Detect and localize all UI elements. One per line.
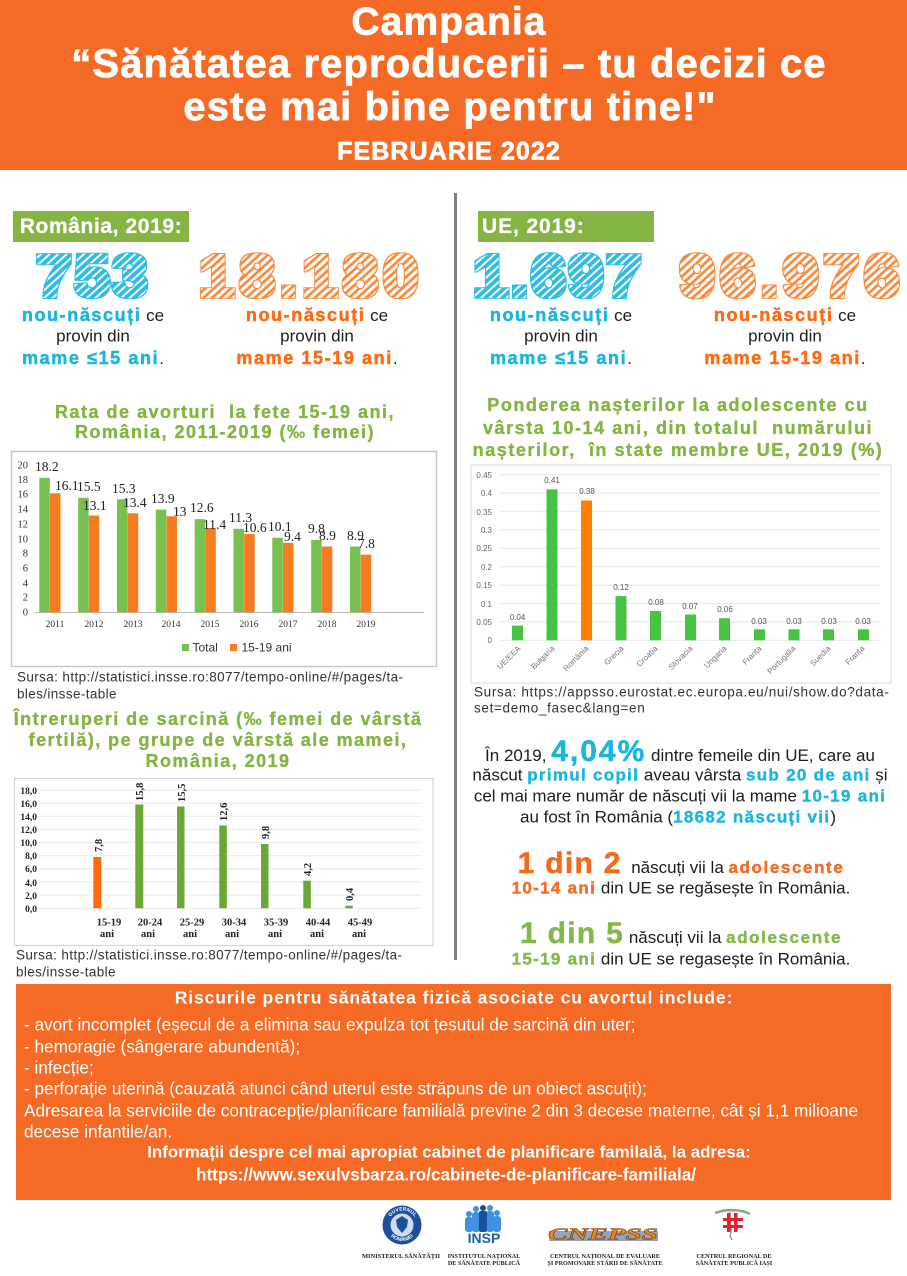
bar chart: abortion rate 2011-2019: Total bbox=[192, 640, 218, 654]
bar chart: EU share of births to adolescents: România bbox=[561, 644, 591, 673]
label: UE 2019 bbox=[478, 211, 654, 242]
bar chart: abortion rate 2011-2019: 8.9 bbox=[319, 528, 336, 543]
text: mame ≤15 ani. bbox=[22, 348, 164, 368]
bar chart: EU share of births to adolescents: 0.25 bbox=[476, 544, 493, 553]
bar chart: abortion rate 2011-2019: 13 bbox=[173, 504, 187, 519]
title line 2: “Sănătatea reproducerii – tu decizi ce bbox=[71, 42, 827, 86]
logo: Ministerul Sanatatii: MINISTERUL SĂNĂTĂȚII bbox=[362, 1252, 440, 1260]
bar chart: EU share of births to adolescents: 0 bbox=[488, 636, 493, 645]
contact information: Informații despre cel mai apropiat cabinet de planificare familală, la adresa: bbox=[147, 1143, 751, 1162]
bar chart: EU share of births to adolescents: Franța bbox=[844, 644, 867, 667]
bar chart: abortion rate 2011-2019: 9.4 bbox=[284, 529, 301, 544]
bar chart: EU share of births to adolescents: 0.4 bbox=[481, 489, 493, 498]
hatched big numbers bbox=[36, 244, 904, 308]
bar chart: pregnancy terminations by age group: 15,5 bbox=[177, 784, 188, 802]
panel heading: Riscurile pentru sănătatea fizică asociate cu avortul include: bbox=[175, 987, 733, 1007]
label: Romania 2019 bbox=[13, 211, 189, 242]
bar chart: pregnancy terminations by age group: 0,0 bbox=[25, 905, 37, 915]
bar chart: abortion rate 2011-2019: 7.8 bbox=[358, 536, 375, 551]
date: FEBRUARIE 2022 bbox=[337, 138, 561, 166]
bar chart: abortion rate 2011-2019: 2 bbox=[23, 592, 28, 604]
bar chart: pregnancy terminations by age group: 40-44 bbox=[306, 918, 331, 928]
bar chart: EU share of births to adolescents: Franța bbox=[741, 644, 764, 667]
contact information bbox=[147, 1143, 751, 1184]
logo: INSP: INSP bbox=[468, 1230, 500, 1246]
bar chart: abortion rate 2011-2019: 10.1 bbox=[268, 519, 292, 534]
text: România, 2019 bbox=[146, 751, 290, 771]
bar chart: pregnancy terminations by age group: ani bbox=[225, 929, 239, 940]
logo: Centrul Regional Iasi: CENTRUL REGIONAL DE bbox=[697, 1253, 771, 1260]
bar chart: pregnancy terminations by age group: 12,0 bbox=[20, 826, 37, 836]
bar chart: EU share of births to adolescents: 0.3 bbox=[481, 526, 493, 535]
text: născut primul copil aveau vârsta sub 20 de ani și bbox=[472, 766, 888, 784]
callout: 1 in 2 bbox=[512, 847, 850, 898]
logo: CNEPSS: ȘI PROMOVARE STĂRII DE SĂNĂTATE bbox=[547, 1259, 663, 1267]
text: nou-născuți ce bbox=[246, 305, 388, 325]
bar chart: pregnancy terminations by age group: 15,8 bbox=[135, 783, 146, 801]
label: UE 2019: UE, 2019: bbox=[482, 215, 585, 238]
title line 1: Campania bbox=[351, 0, 547, 44]
text: provin din bbox=[748, 326, 822, 346]
bar chart: EU share of births to adolescents: 0.03 bbox=[821, 617, 837, 626]
bar chart: abortion rate 2011-2019: 0 bbox=[23, 608, 28, 618]
bar chart: EU share of births to adolescents: 0.08 bbox=[648, 598, 664, 607]
stat text: UE under 15 bbox=[490, 305, 632, 368]
heading: pregnancy terminations chart bbox=[12, 708, 422, 771]
logo: Centrul Regional Iasi: SĂNĂTATE PUBLICĂ IAȘI bbox=[696, 1259, 773, 1267]
bar chart: abortion rate 2011-2019: 10 bbox=[18, 534, 28, 546]
number 96.976: 96.976 bbox=[680, 244, 904, 308]
panel: physical health risks bbox=[16, 984, 891, 1200]
bar chart: EU share of births to adolescents: Suedia bbox=[808, 644, 833, 668]
text: mame 15-19 ani. bbox=[704, 348, 866, 368]
bar chart: abortion rate 2011-2019: 20 bbox=[18, 460, 28, 472]
bar chart: abortion rate 2011-2019: 16 bbox=[18, 490, 28, 500]
bar chart: EU share of births to adolescents: UE/EEA bbox=[495, 644, 523, 671]
bar chart: EU share of births to adolescents: Portugalia bbox=[766, 644, 798, 676]
bar chart: pregnancy terminations by age group: ani bbox=[141, 929, 155, 940]
text: 15-19 ani din UE se regasește în România. bbox=[512, 950, 850, 968]
bar chart: EU share of births to adolescents: 0.03 bbox=[751, 617, 767, 626]
header banner bbox=[0, 0, 907, 170]
bar chart: EU share of births to adolescents: 0.05 bbox=[476, 618, 493, 627]
bar chart: pregnancy terminations by age group: 8,0 bbox=[25, 852, 37, 862]
text: set=demo_fasec&lang=en bbox=[474, 700, 645, 715]
bar chart: abortion rate 2011-2019: 2012 bbox=[84, 620, 104, 630]
bar chart: abortion rate 2011-2019: 2019 bbox=[356, 620, 376, 630]
bar chart: pregnancy terminations by age group: ani bbox=[310, 929, 324, 940]
bar chart: abortion rate 2011-2019: 2015 bbox=[200, 620, 220, 630]
bar chart: abortion rate 2011-2019: 9.8 bbox=[308, 521, 325, 536]
bar chart: abortion rate 2011-2019: 8.9 bbox=[347, 528, 364, 543]
bar chart: pregnancy terminations by age group: 0,4 bbox=[345, 887, 356, 901]
bar chart: EU share of births to adolescents: 0.03 bbox=[855, 617, 871, 626]
logo: INSP bbox=[448, 1205, 521, 1267]
logo: CNEPSS: CENTRUL NAȚIONAL DE EVALUARE bbox=[550, 1253, 660, 1260]
text: au fost în România (18682 născuți vii) bbox=[520, 808, 836, 826]
bar chart: abortion rate 2011-2019: 10.6 bbox=[243, 520, 267, 535]
bar chart: pregnancy terminations by age group: ani bbox=[268, 929, 282, 940]
bar chart: EU share of births to adolescents: 0.41 bbox=[544, 476, 560, 485]
bar chart: pregnancy terminations by age group: 9,8 bbox=[261, 826, 272, 839]
text: Întreruperi de sarcină (‰ femei de vârstă bbox=[14, 709, 422, 729]
text: provin din bbox=[524, 326, 598, 346]
bar chart: abortion rate 2011-2019: 18 bbox=[18, 475, 28, 486]
bar chart: abortion rate 2011-2019: 2011 bbox=[46, 620, 65, 630]
text: Sursa: https://appsso.eurostat.ec.europa.eu/nui/show.do?data- bbox=[474, 684, 890, 699]
bar chart: EU share of births to adolescents: 0.15 bbox=[476, 581, 493, 590]
bar chart: EU share of births to adolescents: 0.2 bbox=[481, 563, 493, 572]
bar chart: abortion rate 2011-2019: 13.4 bbox=[123, 495, 147, 510]
bar chart: abortion rate 2011-2019: 2014 bbox=[162, 620, 181, 630]
stat text: Romania under 15 bbox=[22, 305, 164, 368]
text: nou-născuți ce bbox=[490, 305, 632, 325]
text: 10-14 ani din UE se regăsește în România. bbox=[512, 878, 850, 898]
bar chart: pregnancy terminations by age group: 14,0 bbox=[20, 813, 37, 823]
text: nou-născuți ce bbox=[714, 305, 856, 325]
bar chart: EU share of births to adolescents: Bulgaria bbox=[529, 644, 557, 671]
bar chart: pregnancy terminations by age group: ani bbox=[352, 929, 366, 940]
bar chart: EU share of births to adolescents: 0.35 bbox=[476, 508, 493, 517]
bar chart: pregnancy terminations by age group: 35-39 bbox=[264, 918, 288, 928]
column divider bbox=[454, 193, 457, 960]
bar chart: pregnancy terminations by age group: 25-29 bbox=[180, 918, 204, 928]
bar chart: abortion rate 2011-2019: 15.5 bbox=[77, 479, 101, 494]
logo: INSP: DE SĂNĂTATE PUBLICĂ bbox=[448, 1259, 521, 1267]
text: 1 din 5 născuți vii la adolescente bbox=[520, 917, 842, 950]
bar chart: EU share of births to adolescents: 0.1 bbox=[481, 600, 493, 609]
label: Romania 2019: România, 2019: bbox=[20, 215, 182, 238]
heading: abortion rate chart bbox=[55, 402, 395, 442]
bar chart: EU share of births to adolescents: 0.06 bbox=[717, 605, 733, 614]
logo: Ministerul Sanatatii bbox=[362, 1206, 440, 1260]
logo: CNEPSS bbox=[547, 1224, 663, 1267]
text: fertilă), pe grupe de vârstă ale mamei, bbox=[29, 730, 407, 750]
text: România, 2011-2019 (‰ femei) bbox=[75, 422, 375, 442]
bar chart: abortion rate 2011-2019: 15.3 bbox=[112, 481, 136, 496]
source note 1 bbox=[17, 669, 403, 701]
bar chart: pregnancy terminations by age group: 4,0 bbox=[25, 879, 37, 889]
bar chart: pregnancy terminations by age group: 45-49 bbox=[348, 918, 372, 928]
bar chart: pregnancy terminations by age group: ani bbox=[100, 929, 114, 940]
bar chart: pregnancy terminations by age group: 16,0 bbox=[20, 800, 37, 810]
bar chart: pregnancy terminations by age group: 7,8 bbox=[94, 839, 105, 852]
bar chart: EU share of births to adolescents: 0.07 bbox=[682, 602, 698, 611]
bar chart: EU share of births to adolescents: Croația bbox=[635, 644, 660, 669]
risk list bbox=[24, 1014, 858, 1141]
bar chart: abortion rate 2011-2019: 12.6 bbox=[190, 500, 214, 515]
text: Rata de avorturi la fete 15-19 ani, bbox=[55, 402, 395, 422]
risk list: decese infantile/an. bbox=[24, 1121, 172, 1141]
heading: EU births chart bbox=[473, 395, 883, 460]
paragraph: 4.04% of EU women bbox=[472, 735, 888, 826]
bar chart: abortion rate 2011-2019: 16.1 bbox=[55, 478, 79, 493]
bar chart: pregnancy terminations by age group: 20-24 bbox=[138, 918, 163, 928]
bar chart: pregnancy terminations by age group: 2,0 bbox=[25, 892, 37, 902]
text: Ponderea nașterilor la adolescente cu bbox=[487, 395, 869, 415]
bar chart: EU share of births to adolescents: 0.03 bbox=[786, 617, 802, 626]
source note 3 bbox=[474, 684, 890, 716]
risk list: Adresarea la serviciile de contracepție/planificare familială previne 2 din 3 decese materne, cât și 1,1 milioane bbox=[24, 1100, 858, 1120]
bar chart: abortion rate 2011-2019: 12 bbox=[18, 520, 28, 530]
bar chart: abortion rate 2011-2019: 18.2 bbox=[35, 459, 59, 474]
risk list: - infecție; bbox=[24, 1057, 94, 1077]
bar chart: abortion rate 2011-2019: 2018 bbox=[318, 620, 337, 630]
bar chart: pregnancy terminations by age group: 18,0 bbox=[20, 787, 37, 797]
logo: Ministerul Sanatatii: ROMÂNIEI bbox=[390, 1234, 414, 1242]
bar chart: EU share of births to adolescents: 0.04 bbox=[510, 613, 526, 622]
bar chart: pregnancy terminations by age group: 12,6 bbox=[219, 803, 230, 821]
number 753: 753 bbox=[36, 244, 150, 308]
text: nou-născuți ce bbox=[22, 305, 164, 325]
text: Sursa: http://statistici.insse.ro:8077/tempo-online/#/pages/ta- bbox=[16, 947, 402, 962]
bar chart: pregnancy terminations by age group: ani bbox=[183, 929, 197, 940]
bar chart: abortion rate 2011-2019: 13.1 bbox=[83, 498, 107, 513]
text: provin din bbox=[56, 326, 130, 346]
text: vârsta 10-14 ani, din totalul numărului bbox=[483, 418, 873, 438]
text: provin din bbox=[280, 326, 354, 346]
bar chart: abortion rate 2011-2019: 8 bbox=[23, 548, 28, 560]
bar chart: EU share of births to adolescents: 0.38 bbox=[579, 487, 595, 496]
bar chart: abortion rate 2011-2019: 6 bbox=[23, 564, 28, 574]
title line 3: este mai bine pentru tine!" bbox=[183, 85, 717, 129]
bar chart: pregnancy terminations by age group: 30-34 bbox=[222, 918, 247, 928]
text: În 2019, 4,04% dintre femeile din UE, care au bbox=[485, 735, 875, 768]
logo: Centrul Regional Iasi bbox=[696, 1210, 773, 1267]
number 1.697: 1.697 bbox=[473, 244, 644, 308]
text: bles/insse-table bbox=[16, 964, 116, 979]
bar chart: pregnancy terminations by age group: 4,2 bbox=[303, 863, 314, 876]
text: Sursa: http://statistici.insse.ro:8077/tempo-online/#/pages/ta- bbox=[17, 669, 403, 684]
bar chart: abortion rate 2011-2019: 2013 bbox=[124, 620, 143, 630]
bar chart: abortion rate 2011-2019: 11.4 bbox=[203, 517, 226, 532]
source note 2 bbox=[16, 947, 402, 979]
text: cel mai mare număr de născuți vii la mame 10-19 ani bbox=[474, 786, 886, 806]
stat text: Romania 15-19 bbox=[236, 305, 398, 368]
bar chart: abortion rate 2011-2019: 15-19 ani bbox=[242, 640, 292, 654]
text: mame ≤15 ani. bbox=[490, 348, 632, 368]
bar chart: abortion rate 2011-2019: 14 bbox=[18, 504, 29, 516]
callout: 1 in 5 bbox=[512, 917, 850, 968]
contact information: https://www.sexulvsbarza.ro/cabinete-de-planificare-familiala/ bbox=[196, 1165, 696, 1184]
bar chart: abortion rate 2011-2019: 11.3 bbox=[229, 510, 252, 525]
bar chart: abortion rate 2011-2019: 2016 bbox=[240, 620, 259, 630]
text: mame 15-19 ani. bbox=[236, 348, 398, 368]
bar chart: pregnancy terminations by age group: 10,0 bbox=[20, 839, 37, 849]
bar chart: EU share of births to adolescents: 0.12 bbox=[613, 583, 629, 592]
logo: INSP: INSTITUTUL NAȚIONAL bbox=[448, 1253, 520, 1260]
bar chart: EU share of births to adolescents: Slovacia bbox=[667, 644, 695, 672]
bar chart: EU share of births to adolescents: Ungaria bbox=[702, 644, 729, 670]
number 18.180: 18.180 bbox=[199, 244, 423, 308]
bar chart: pregnancy terminations by age group: 6,0 bbox=[25, 865, 37, 875]
bar chart: abortion rate 2011-2019: 2017 bbox=[278, 620, 298, 630]
stat text: UE 15-19 bbox=[704, 305, 866, 368]
risk list: - perforație uterină (cauzată atunci când uterul este străpuns de un obiect ascuțit); bbox=[24, 1078, 647, 1098]
text: bles/insse-table bbox=[17, 686, 117, 701]
risk list: - avort incomplet (eșecul de a elimina sau expulza tot țesutul de sarcină din uter; bbox=[24, 1014, 635, 1034]
text: 1 din 2 născuți vii la adolescente bbox=[518, 847, 844, 880]
bar chart: EU share of births to adolescents: 0.45 bbox=[476, 471, 493, 480]
logo: CNEPSS: CNEPSS bbox=[548, 1224, 658, 1244]
text: nașterilor, în state membre UE, 2019 (%) bbox=[473, 440, 883, 460]
bar chart: abortion rate 2011-2019: 4 bbox=[23, 578, 29, 590]
bar chart: EU share of births to adolescents: Grecia bbox=[602, 644, 626, 667]
bar chart: pregnancy terminations by age group: 15-19 bbox=[97, 918, 121, 928]
logo: Ministerul Sanatatii: GUVERNUL bbox=[388, 1207, 416, 1217]
risk list: - hemoragie (sângerare abundentă); bbox=[24, 1036, 300, 1056]
bar chart: abortion rate 2011-2019: 13.9 bbox=[151, 491, 175, 506]
